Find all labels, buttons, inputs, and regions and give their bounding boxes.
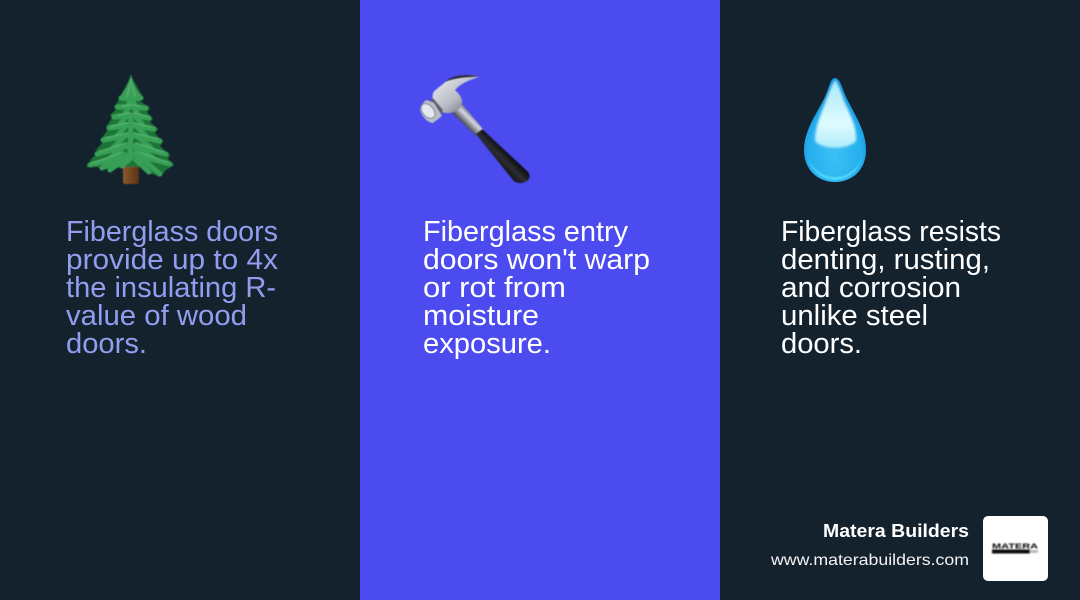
text block: right panel copy: unlike steel (781, 300, 928, 332)
icon: water drop (804, 78, 866, 182)
text block: left panel copy (66, 216, 278, 360)
text block: center panel copy: exposure. (423, 328, 551, 360)
text block: center panel copy: doors won't warp (423, 244, 650, 276)
text block: left panel copy: provide up to 4x (66, 244, 278, 276)
panel: center background (360, 0, 720, 600)
logo badge: MATERA (992, 544, 1038, 550)
text block: center panel copy: Fiberglass entry (423, 216, 629, 248)
text block: left panel copy: the insulating R- (66, 272, 276, 304)
panel: right background (720, 0, 1080, 600)
text block: right panel copy: and corrosion (781, 272, 961, 304)
text block: center panel copy: moisture (423, 300, 539, 332)
text block: left panel copy: doors. (66, 328, 147, 360)
text block: right panel copy: denting, rusting, (781, 244, 990, 276)
icon: evergreen tree (86, 74, 174, 184)
text block: right panel copy: Fiberglass resists (781, 216, 1001, 248)
logo badge (983, 516, 1048, 581)
panel: left background (0, 0, 360, 600)
text block: right panel copy: doors. (781, 328, 862, 360)
text block: center panel copy: or rot from (423, 272, 566, 304)
icon: claw hammer (418, 75, 529, 183)
brand name: Matera Builders (823, 521, 969, 541)
text block: left panel copy: value of wood (66, 300, 247, 332)
text block: left panel copy: Fiberglass doors (66, 216, 278, 248)
text block: center panel copy (423, 216, 650, 360)
text block: right panel copy (781, 216, 1001, 360)
website url: www.materabuilders.com (770, 552, 969, 569)
